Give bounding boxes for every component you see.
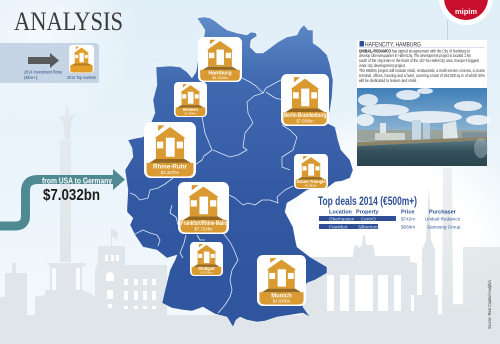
market: Munich: Munich <box>271 293 292 299</box>
market: Frankfurt/Rhine-Main <box>178 182 229 234</box>
row: Oberhausen: Unibail-Rodamco <box>425 216 461 221</box>
top deals table <box>318 196 461 229</box>
market: Hamburg: $4.262bn <box>212 76 228 80</box>
row: Frankfurt: Samsung Group <box>427 224 461 229</box>
state borders <box>130 78 297 313</box>
market: Saxon Triangle: $1.083bn <box>305 184 317 188</box>
market: Saxon Triangle <box>294 154 328 189</box>
flow arrow: USA to Germany <box>0 169 125 226</box>
market: Hamburg <box>198 37 242 82</box>
flow value: $7.032bn <box>43 187 100 204</box>
panel body text: inner city development project. <box>359 63 406 68</box>
legend label: investment flows: 2014 Investment flows <box>24 70 63 74</box>
panel body text: UNIBAIL-RODAMCO has signed an agreement with the City of Hamburg to <box>359 48 470 54</box>
market: Bremen: $1.484bn <box>185 111 197 116</box>
legend label: investment flows: (€bn+) <box>24 75 38 80</box>
skyline silhouette <box>0 107 500 344</box>
panel: HafenCity Hamburg <box>357 40 487 88</box>
legend <box>0 43 99 83</box>
column headers <box>329 210 457 216</box>
market: Munich: $4.836bn <box>273 298 291 303</box>
towers <box>414 185 438 315</box>
row: Oberhausen: CentrO <box>361 216 376 221</box>
legend label: investment flows <box>24 70 63 80</box>
frisian islands <box>147 11 194 68</box>
table title: Top deals 2014 (€500m+) <box>318 196 417 208</box>
row: Frankfurt: $569m <box>401 224 415 229</box>
legend label: top markets: 2014 Top markets <box>67 75 97 80</box>
market: Munich <box>257 255 306 306</box>
panel body text <box>359 48 485 83</box>
row: Frankfurt: Silberturm <box>358 224 379 229</box>
column headers: Price <box>401 210 414 216</box>
photo: HafenCity rendering <box>356 88 490 166</box>
mipim badge <box>439 0 493 40</box>
row: Oberhausen <box>319 216 461 221</box>
market: Stuttgart: $1.533bn <box>201 271 213 275</box>
market: Saxon Triangle: Saxon Triangle <box>297 179 326 184</box>
icon: investment flow arrow <box>28 53 59 68</box>
panel body text: will be dedicated to leisure and retail. <box>359 78 417 83</box>
market: Stuttgart: Stuttgart <box>198 266 215 271</box>
market: Berlin-Brandenburg: Berlin-Brandenburg <box>284 113 326 119</box>
market: Rhine-Ruhr: Rhine-Ruhr <box>153 163 187 171</box>
mipim badge: mipim <box>455 9 477 16</box>
row: Oberhausen: $742m <box>401 216 415 221</box>
market: Rhine-Ruhr: $4.367bn <box>161 170 180 175</box>
row: Oberhausen: Oberhausen <box>329 216 355 221</box>
column headers: Property <box>356 210 380 216</box>
victory column <box>58 107 76 262</box>
market: Berlin-Brandenburg: $7.006bn <box>296 118 314 123</box>
market: Stuttgart <box>190 242 223 276</box>
market: Berlin-Brandenburg <box>281 74 329 126</box>
panel heading: HAFENCITY, HAMBURG <box>365 42 421 48</box>
row: Frankfurt: Frankfurt <box>329 224 348 229</box>
title: ANALYSIS <box>14 7 123 36</box>
map of Germany <box>125 11 353 327</box>
brandenburg gate <box>300 235 417 315</box>
market: Hamburg: Hamburg <box>208 70 232 76</box>
market: Bremen: Bremen <box>183 107 198 112</box>
column headers: Location <box>329 210 353 216</box>
market: Frankfurt/Rhine-Main: $7.724bn <box>194 226 213 231</box>
row: Frankfurt <box>319 224 461 229</box>
market: Bremen <box>174 82 207 117</box>
flow label: from USA to Germany <box>42 176 112 186</box>
source note: Source: Real Capital Analytics <box>487 279 492 329</box>
market: Frankfurt/Rhine-Main: Frankfurt/Rhine-Main <box>181 220 226 227</box>
legend icon: top market house <box>69 45 94 73</box>
column headers: Purchaser <box>429 210 457 216</box>
market: Rhine-Ruhr <box>144 122 196 178</box>
